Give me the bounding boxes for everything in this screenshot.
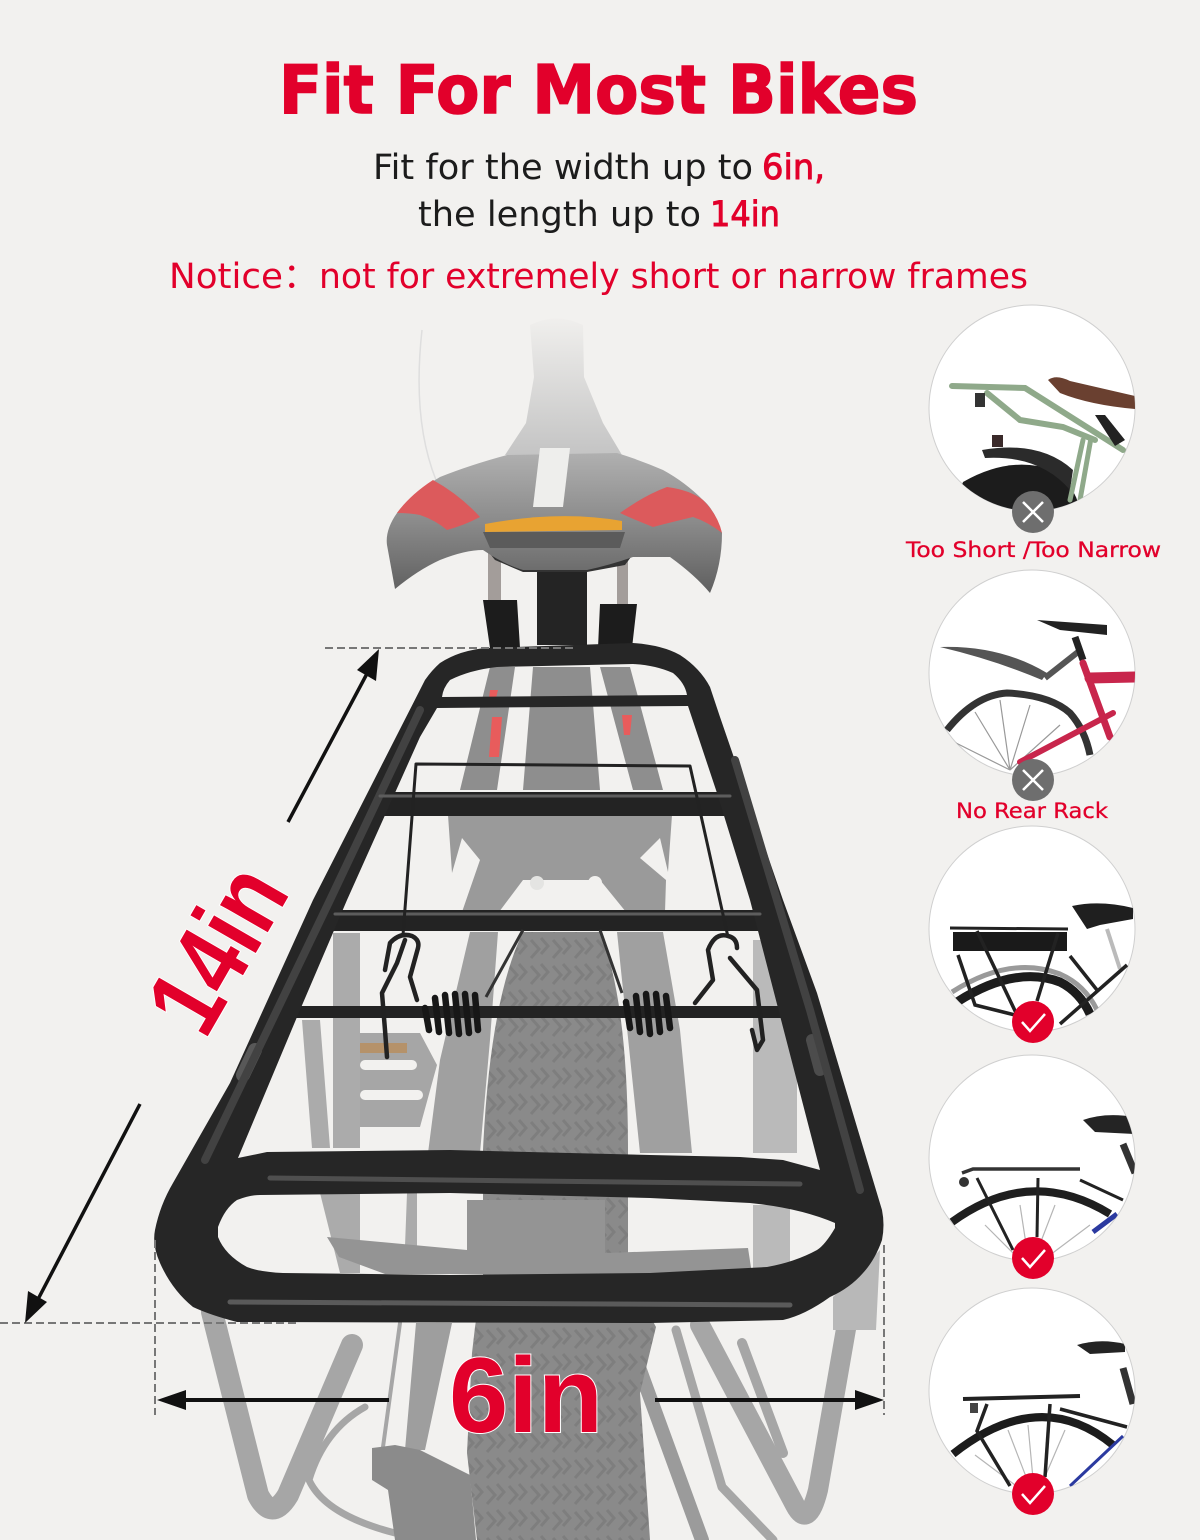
saddle red panels (397, 480, 480, 530)
caption: no rear rack: No Rear Rack (956, 799, 1109, 823)
cross bars (375, 792, 735, 816)
strut wires (486, 930, 622, 997)
rack frame tube (154, 643, 884, 1323)
notice: Notice (169, 257, 283, 297)
circle: fit e-bike (929, 826, 1135, 1043)
subtitle text (373, 148, 825, 235)
arrow: right (655, 1398, 856, 1402)
hooks (382, 935, 763, 1057)
lower rack legs (212, 1260, 858, 1540)
spring clip wire (403, 764, 728, 937)
faded bike behind rack (212, 667, 880, 1540)
arrow: down (35, 1104, 140, 1305)
mudguard plate (327, 1200, 752, 1274)
icon: check (1012, 1237, 1054, 1279)
derailleur (372, 1445, 476, 1540)
label: 6in: 6in (449, 1335, 603, 1455)
wheel tyre (467, 932, 656, 1540)
icon: check (1012, 1001, 1054, 1043)
notice: ： (283, 257, 318, 297)
subtitle text: Fit for the width up to (373, 148, 753, 188)
red frame accents (489, 690, 632, 757)
circle: no rear rack (929, 570, 1135, 801)
seat stays above first bar (460, 667, 663, 790)
icon: check (1012, 1473, 1054, 1515)
saddle reflector (485, 516, 622, 532)
rear rack (154, 643, 884, 1323)
seat tube fade (505, 318, 622, 455)
caption: too short: Too Short /Too Narrow (905, 538, 1161, 562)
circle: fit city bike (929, 1288, 1135, 1515)
arrow: up (288, 668, 370, 822)
subtitle text: the length up to (418, 195, 701, 235)
springs (425, 994, 670, 1034)
subtitle text: 14in (710, 195, 780, 235)
saddle (387, 330, 722, 648)
tube highlights (205, 710, 860, 1305)
label: 14in: 14in (124, 846, 311, 1052)
circle: too short (929, 305, 1135, 533)
upper rack struts (302, 933, 417, 1273)
width dimension: 6in (155, 1240, 884, 1455)
circle: fit rack bike (929, 1055, 1135, 1279)
icon: cross (1012, 491, 1054, 533)
length dimension: 14in (0, 648, 575, 1323)
subtitle text: 6in, (762, 148, 825, 188)
lower frame stays (428, 932, 692, 1153)
icon: cross (1012, 759, 1054, 801)
title: Fit For Most Bikes (279, 51, 918, 129)
saddle white stripe (533, 448, 570, 507)
notice: not for extremely short or narrow frames (319, 257, 1028, 297)
pedal (360, 1033, 437, 1127)
mudguard and brake (448, 815, 672, 912)
arrow: left (185, 1398, 389, 1402)
